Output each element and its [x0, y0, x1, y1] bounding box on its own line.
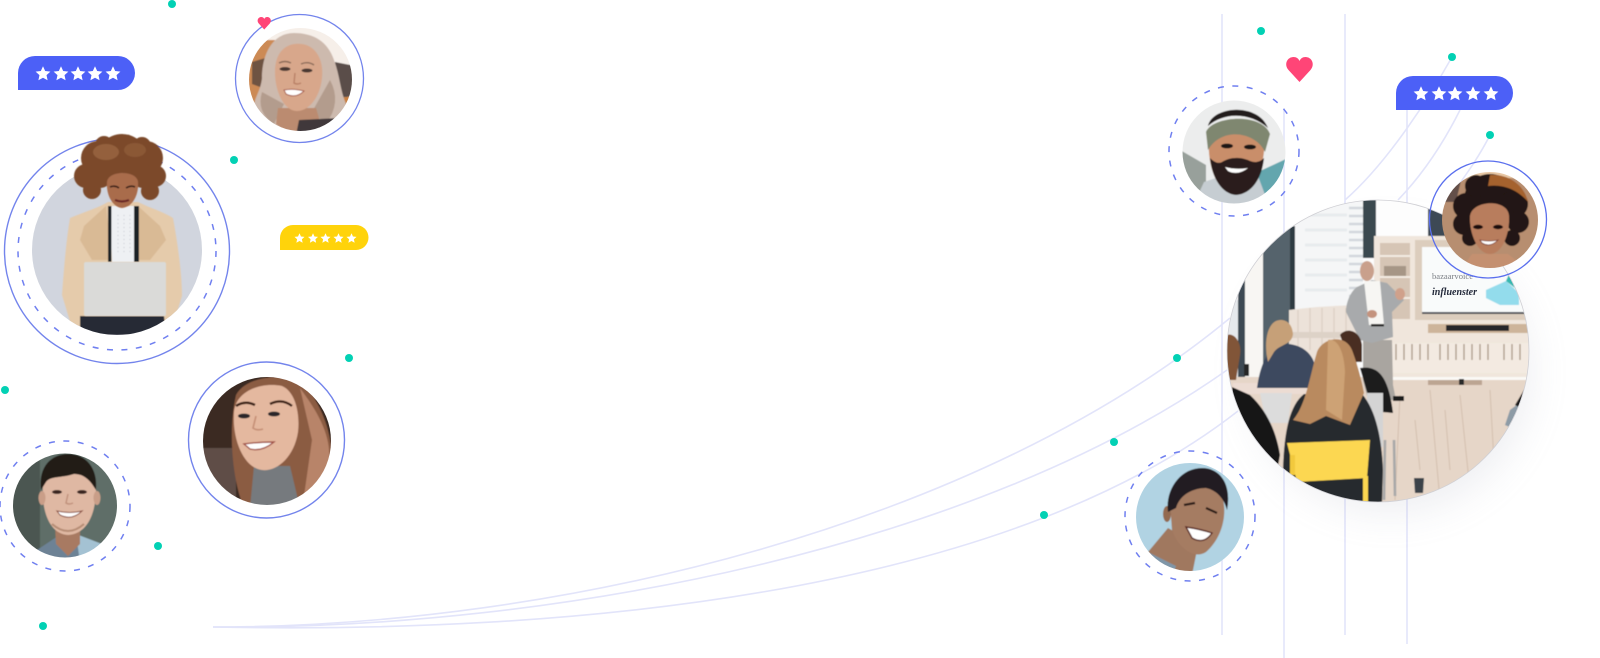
window and curtains	[1228, 200, 1445, 378]
rating badge: blue left	[18, 56, 135, 90]
avatar: man with headband	[1169, 86, 1299, 216]
screen text	[1432, 271, 1477, 298]
presentation photo	[1225, 198, 1535, 505]
floor	[1225, 377, 1535, 505]
screen text: influenster	[1432, 287, 1477, 298]
avatar: woman with curly hair	[1430, 161, 1546, 278]
photo shadow	[1250, 232, 1530, 512]
podium	[1288, 305, 1357, 364]
avatar: man in blue shirt	[0, 441, 130, 571]
avatar: woman with laptop	[4, 134, 230, 364]
icon: large heart	[1286, 57, 1313, 82]
icon: small heart	[258, 17, 271, 30]
screen text: bazaarvoice	[1432, 271, 1473, 281]
avatar: woman with long auburn hair	[188, 362, 344, 518]
avatar: laughing man	[1125, 451, 1255, 581]
rating badge: yellow	[280, 225, 368, 250]
presenter	[1346, 261, 1405, 401]
wall unit with shelves	[1374, 236, 1535, 378]
audience	[1226, 320, 1530, 505]
rating badge: blue right	[1396, 76, 1513, 110]
connector lines	[213, 14, 1490, 658]
avatar: blonde woman	[236, 14, 364, 142]
